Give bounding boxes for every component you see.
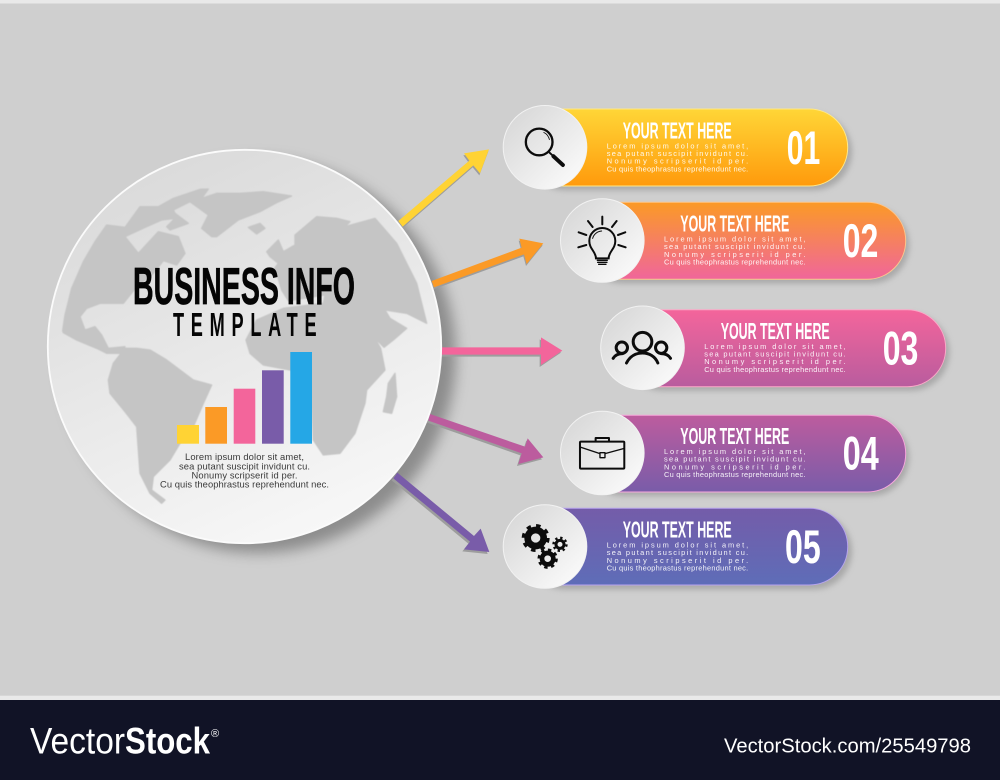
pill shadow bbox=[527, 512, 852, 590]
arrow 5: purple bbox=[392, 473, 489, 554]
arrow 1: yellow bbox=[398, 149, 489, 229]
globe description text: Lorem ipsum dolor sit amet, bbox=[185, 451, 304, 462]
body 03 bbox=[704, 342, 846, 374]
image id: VectorStock.com/25549798 bbox=[724, 736, 971, 758]
body 01: Lorem ipsum dolor sit amet, bbox=[607, 141, 748, 150]
number 03: 03 bbox=[883, 321, 918, 374]
arrow 3: pink bbox=[439, 337, 562, 367]
body 04: sea putant suscipit invidunt cu. bbox=[664, 455, 805, 464]
pill shadow bbox=[527, 113, 852, 190]
globe description text: Cu quis theophrastus reprehendunt nec. bbox=[160, 478, 329, 490]
body 01: Cu quis theophrastus reprehendunt nec. bbox=[607, 164, 748, 173]
body 05 bbox=[607, 540, 748, 572]
panel: card 03 bbox=[601, 306, 950, 391]
pill 03 bbox=[622, 310, 946, 387]
body 05: Cu quis theophrastus reprehendunt nec. bbox=[607, 564, 748, 572]
heading 03: YOUR TEXT HERE bbox=[721, 318, 830, 344]
number 01: 01 bbox=[787, 121, 820, 174]
world map bbox=[63, 189, 427, 503]
pill 01 bbox=[525, 109, 848, 186]
body 03: Nonumy scripserit id per. bbox=[704, 357, 846, 366]
body 05: sea putant suscipit invidunt cu. bbox=[607, 548, 748, 557]
number 05: 05 bbox=[785, 520, 821, 573]
icon: light bulb bbox=[578, 217, 626, 264]
panel: card 01 bbox=[503, 106, 852, 190]
arrows from globe to cards bbox=[392, 149, 562, 554]
icon chip 01 bbox=[503, 106, 587, 189]
heading 02: YOUR TEXT HERE bbox=[680, 210, 789, 236]
pill shadow bbox=[624, 314, 950, 391]
body 01 bbox=[607, 141, 748, 173]
body 02: Nonumy scripserit id per. bbox=[664, 250, 805, 259]
icon chip 05 bbox=[503, 505, 587, 588]
icon: gears bbox=[524, 526, 566, 567]
globe description text bbox=[160, 451, 329, 490]
panel: globe bbox=[48, 150, 441, 543]
footer light strip bbox=[0, 696, 1000, 700]
arrow 2: orange bbox=[431, 239, 543, 289]
globe disc bbox=[48, 150, 441, 543]
icon chip 04 bbox=[560, 411, 644, 495]
icon chip 02 bbox=[560, 199, 644, 282]
body 02: Cu quis theophrastus reprehendunt nec. bbox=[664, 258, 805, 266]
icon: briefcase bbox=[580, 438, 624, 469]
registered mark: ® bbox=[211, 728, 219, 740]
body 04: Cu quis theophrastus reprehendunt nec. bbox=[664, 470, 805, 479]
number 02: 02 bbox=[843, 214, 878, 267]
pill 02 bbox=[582, 202, 906, 279]
body 02: Lorem ipsum dolor sit amet, bbox=[664, 234, 806, 244]
icon: people bbox=[613, 332, 671, 363]
globe description text: sea putant suscipit invidunt cu. bbox=[179, 460, 310, 471]
panel: card 05 bbox=[503, 505, 852, 590]
body 05: Nonumy scripserit id per. bbox=[607, 556, 748, 565]
footer logo bold part: Stock bbox=[125, 720, 210, 761]
subtitle: template: TEMPLATE bbox=[173, 306, 317, 343]
title: business info: BUSINESS INFO bbox=[133, 258, 355, 316]
body 02: sea putant suscipit invidunt cu. bbox=[664, 242, 805, 251]
icon: magnifier bbox=[526, 129, 563, 165]
top light strip bbox=[0, 0, 1000, 4]
pill shadow bbox=[584, 206, 909, 284]
icon chip 03 bbox=[601, 306, 684, 390]
body 01: sea putant suscipit invidunt cu. bbox=[607, 149, 748, 158]
body 04 bbox=[664, 447, 806, 479]
heading 01: YOUR TEXT HERE bbox=[623, 117, 732, 143]
body 05: Lorem ipsum dolor sit amet, bbox=[607, 540, 748, 550]
body 04: Nonumy scripserit id per. bbox=[664, 462, 805, 471]
pill shadow bbox=[584, 419, 909, 496]
pill 05 bbox=[525, 508, 848, 585]
heading 05: YOUR TEXT HERE bbox=[623, 516, 732, 542]
body 03: Lorem ipsum dolor sit amet, bbox=[704, 342, 846, 351]
arrow 4: magenta bbox=[427, 414, 543, 466]
footer band bbox=[0, 700, 1000, 780]
globe shadow bbox=[62, 159, 456, 553]
heading 04: YOUR TEXT HERE bbox=[680, 423, 789, 449]
pill 04 bbox=[582, 415, 906, 492]
body 02 bbox=[664, 234, 806, 266]
body 04: Lorem ipsum dolor sit amet, bbox=[664, 447, 806, 456]
body 01: Nonumy scripserit id per. bbox=[607, 157, 748, 166]
footer logo: Vector bbox=[30, 720, 125, 761]
number 04: 04 bbox=[843, 427, 879, 480]
panel: card 02 bbox=[560, 199, 909, 284]
globe description text: Nonumy scripserit id per. bbox=[192, 469, 298, 480]
body 03: Cu quis theophrastus reprehendunt nec. bbox=[704, 365, 846, 374]
panel: card 04 bbox=[560, 411, 909, 496]
bar chart bbox=[177, 352, 312, 444]
body 03: sea putant suscipit invidunt cu. bbox=[704, 349, 846, 358]
